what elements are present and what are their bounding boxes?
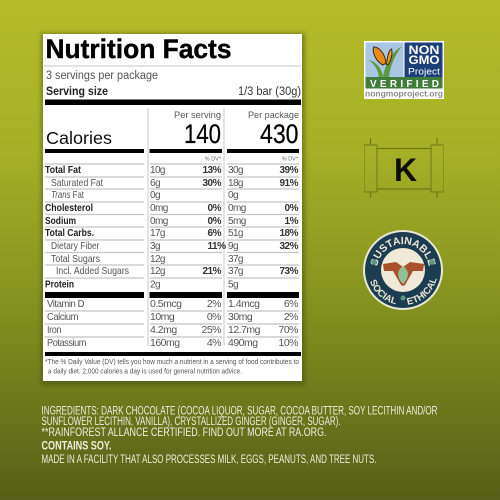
- row: vitamin d: 1.4mcg: [228, 298, 260, 310]
- ingredients text: [42, 406, 438, 466]
- calories row: 140: [184, 119, 221, 149]
- seal text: [370, 236, 437, 305]
- column dividers: [148, 108, 224, 346]
- seal text: SOCIAL: [370, 280, 396, 304]
- row: total fat: Total Fat: [45, 164, 81, 176]
- row: total sugars: 37g: [228, 254, 243, 265]
- row: iron: 70%: [278, 324, 298, 336]
- footnote: [45, 359, 299, 376]
- row: trans fat: [51, 189, 238, 201]
- row: saturated fat: 6g: [150, 178, 160, 189]
- row: saturated fat: [51, 177, 299, 189]
- row: protein: Protein: [45, 278, 74, 290]
- row: total sugars: 12g: [150, 254, 165, 265]
- row: protein: 5g: [228, 280, 238, 290]
- seal text: SUSTAINABLE: [370, 236, 436, 266]
- footnote: a daily diet. 2,000 calories a day is used for general nutrition advice.: [48, 368, 242, 376]
- ingredients text: CONTAINS SOY.: [42, 440, 112, 452]
- calories row: [46, 110, 299, 149]
- row: calcium: 30mg: [228, 311, 253, 323]
- row: sodium: 5mg: [228, 216, 246, 227]
- row: total fat: 13%: [202, 165, 222, 176]
- row: cholesterol: Cholesterol: [45, 202, 93, 214]
- row: calcium: 2%: [284, 311, 298, 323]
- row: cholesterol: 0mg: [228, 203, 246, 214]
- row: total sugars: Total Sugars: [51, 253, 100, 265]
- row: added sugars: [56, 265, 299, 277]
- row: trans fat: Trans Fat: [51, 189, 84, 201]
- row: dietary fiber: 9g: [228, 241, 238, 252]
- row: total carbs: 18%: [279, 228, 299, 239]
- calories row: Per serving: [174, 110, 221, 121]
- row: added sugars: 12g: [150, 266, 165, 277]
- row: potassium: Potassium: [47, 337, 87, 349]
- row: total fat: [45, 164, 299, 176]
- row: cholesterol: 0%: [208, 203, 222, 214]
- calories row: 430: [260, 119, 298, 149]
- row: protein: 2g: [150, 280, 160, 290]
- row: total fat: 10g: [150, 165, 165, 176]
- row: total sugars: [51, 253, 243, 265]
- leaves: [369, 46, 402, 77]
- title: Nutrition Facts: [46, 34, 232, 64]
- row: vitamin d: 2%: [207, 298, 221, 310]
- row: added sugars: Incl. Added Sugars: [56, 265, 129, 277]
- row: iron: [47, 324, 298, 336]
- row: total carbs: 6%: [208, 228, 222, 239]
- row: dietary fiber: 32%: [279, 241, 299, 252]
- row: saturated fat: 18g: [228, 178, 243, 189]
- row: sodium: 1%: [285, 216, 299, 227]
- row: total carbs: Total Carbs.: [45, 227, 94, 239]
- row: saturated fat: 91%: [279, 178, 299, 189]
- row: total fat: 39%: [279, 165, 299, 176]
- serving size: 1/3 bar (30g): [238, 86, 301, 98]
- icon: non-gmo project verified badge: VERIFIED: [370, 79, 439, 90]
- row: total carbs: 17g: [150, 228, 165, 239]
- row: protein: [45, 278, 238, 290]
- butterfly: [373, 47, 392, 65]
- row: sodium: [45, 215, 299, 227]
- row: cholesterol: 0mg: [150, 203, 168, 214]
- row: dietary fiber: Dietary Fiber: [51, 240, 100, 252]
- icon: non-gmo project verified badge: [364, 41, 444, 99]
- row: potassium: 10%: [278, 337, 298, 349]
- row: dietary fiber: 11%: [208, 241, 226, 252]
- serving size: Serving size: [46, 86, 108, 98]
- row: calcium: [47, 311, 298, 323]
- row: vitamin d: [47, 298, 298, 310]
- row: added sugars: 37g: [228, 266, 243, 277]
- row: trans fat: 0g: [150, 190, 160, 201]
- calories row: Per package: [248, 110, 299, 121]
- row: calcium: 0%: [207, 311, 221, 323]
- row: potassium: 160mg: [150, 337, 180, 349]
- row: sodium: 0mg: [150, 216, 168, 227]
- row: trans fat: 0g: [228, 190, 238, 201]
- row: calcium: 10mg: [150, 311, 175, 323]
- panel: nutrition facts label: [43, 34, 302, 381]
- row: iron: 12.7mg: [228, 324, 261, 336]
- row: total fat: 30g: [228, 165, 243, 176]
- leaf: [398, 266, 408, 284]
- servings per package: 3 servings per package: [46, 70, 158, 82]
- row: saturated fat: Saturated Fat: [51, 177, 103, 189]
- row: iron: 25%: [201, 324, 221, 336]
- icon: sustainable social ethical seal: [363, 230, 443, 310]
- row: added sugars: 21%: [202, 266, 222, 277]
- panel: nutrition facts label: % DV*: [282, 156, 299, 162]
- ingredients text: SUNFLOWER LECITHIN, VANILLA), CRYSTALLIZED GINGER (GINGER, SUGAR).: [42, 416, 340, 428]
- row: potassium: 490mg: [228, 337, 258, 349]
- row: potassium: 4%: [207, 337, 221, 349]
- row: vitamin d: 0.5mcg: [150, 298, 182, 310]
- row: sodium: 0%: [208, 216, 222, 227]
- row: total carbs: 51g: [228, 228, 243, 239]
- icon: non-gmo project verified badge: Project: [408, 66, 440, 78]
- panel: nutrition facts label: % DV*: [205, 156, 222, 162]
- icon: non-gmo project verified badge: NON: [408, 45, 440, 57]
- row: cholesterol: [45, 202, 299, 214]
- hands: [383, 262, 424, 286]
- serving size: [46, 86, 301, 98]
- row: cholesterol: 0%: [285, 203, 299, 214]
- row: potassium: [47, 337, 298, 349]
- icon: non-gmo project verified badge: nongmoproject.org: [365, 90, 443, 98]
- row: iron: 4.2mg: [150, 324, 177, 336]
- icon: kosher scroll k: [364, 138, 444, 198]
- row: calcium: Calcium: [47, 311, 79, 323]
- row: saturated fat: 30%: [202, 178, 222, 189]
- calories row: Calories: [46, 128, 112, 148]
- row: total carbs: [45, 227, 299, 239]
- row: dietary fiber: [51, 240, 299, 252]
- seal text: ETHICAL: [406, 278, 437, 305]
- row: added sugars: 73%: [279, 266, 299, 277]
- row: sodium: Sodium: [45, 215, 76, 227]
- icon: kosher scroll k: K: [394, 152, 417, 188]
- row: vitamin d: 6%: [284, 298, 298, 310]
- ingredients text: **RAINFOREST ALLANCE CERTIFIED. FIND OUT MORE AT RA.ORG.: [42, 427, 326, 439]
- icon: non-gmo project verified badge: GMO: [408, 55, 440, 67]
- row: vitamin d: Vitamin D: [47, 298, 85, 310]
- footnote: *The % Daily Value (DV) tells you how much a nutrient in a serving of food contributes to: [45, 359, 299, 366]
- row: dietary fiber: 3g: [150, 241, 160, 252]
- row: iron: Iron: [47, 324, 62, 336]
